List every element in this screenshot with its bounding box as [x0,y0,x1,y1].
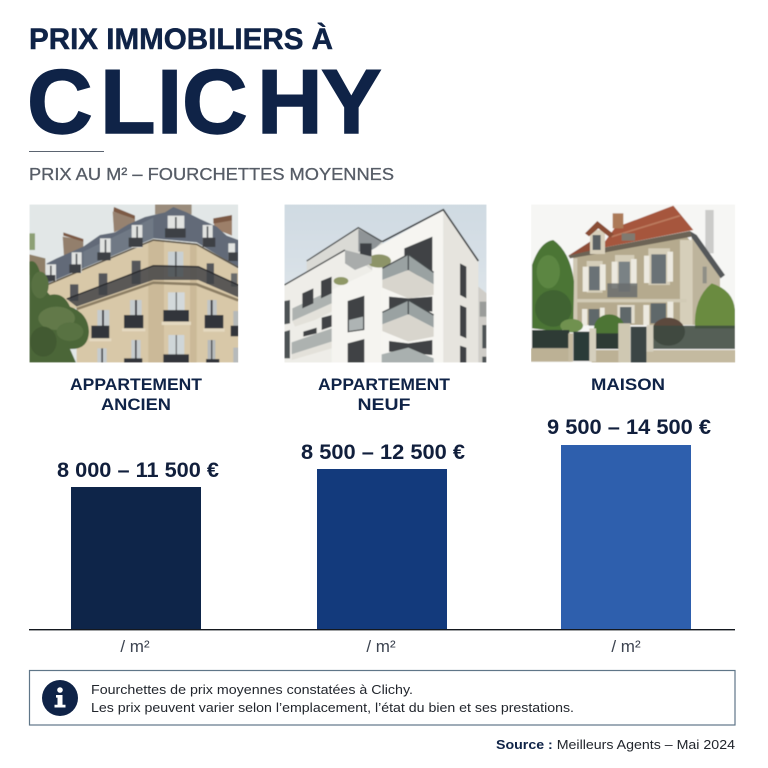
dormer [590,230,605,254]
photo: appartement ancien [29,204,238,363]
roof [45,207,238,284]
row 3 windows [168,292,185,312]
callout text [91,682,574,715]
label: appartement ancien: APPARTEMENT [70,375,203,394]
tree [29,261,89,363]
short divider [29,151,104,152]
row 4 windows [168,335,184,356]
cornice [45,240,238,286]
label: appartement neuf: APPARTEMENT [318,375,451,394]
value: maison: 9 500 – 14 500 € [547,416,711,439]
subtitle: PRIX AU M² – FOURCHETTES MOYENNES [29,164,394,184]
photo: appartement neuf [284,204,487,363]
plants [367,254,391,268]
continuous balcony [67,266,238,307]
bar: appartement neuf [317,469,447,629]
value: appartement ancien: 8 000 – 11 500 € [57,459,219,482]
upper terrace [307,228,382,275]
title: prix immobiliers à: PRIX IMMOBILIERS À [29,22,333,56]
title: Clichy: CLICHY [27,52,382,153]
value: appartement neuf: 8 500 – 12 500 € [301,441,465,464]
trees [532,240,574,332]
dormers [46,264,56,281]
upper loggia [404,237,432,282]
label: appartement ancien: ANCIEN [101,395,171,414]
unit: appartement neuf: / m² [366,637,396,656]
label: appartement neuf: NEUF [358,395,410,414]
fence and wall [532,330,569,348]
unit: maison: / m² [611,637,641,656]
callout: info box [30,670,735,725]
label: appartement ancien [70,375,203,414]
source: Source : Meilleurs Agents – Mai 2024 [496,737,735,752]
facade [45,241,238,363]
roof window [622,233,635,241]
label: maison: MAISON [591,375,665,394]
icon: info [42,680,78,716]
roof [568,242,590,256]
windows [587,261,603,293]
main white volumes [284,251,372,360]
bar: maison [561,445,691,629]
unit: appartement ancien: / m² [120,637,150,656]
bar: appartement ancien [71,487,201,629]
facade [572,236,690,326]
windows [302,288,313,308]
bar chart [29,416,735,656]
label: appartement neuf [318,375,451,414]
shrubs [594,314,624,334]
row 2 windows [70,284,78,301]
photo: maison [531,204,735,363]
balconies [382,254,434,284]
callout text: Fourchettes de prix moyennes constatées à Clichy. [91,682,413,697]
chimney right [705,210,714,253]
axis line [29,629,735,630]
chimney [613,213,623,228]
callout text: Les prix peuvent varier selon l’emplacement, l’état du bien et ses prestations. [91,700,574,715]
chimneys [63,237,83,257]
